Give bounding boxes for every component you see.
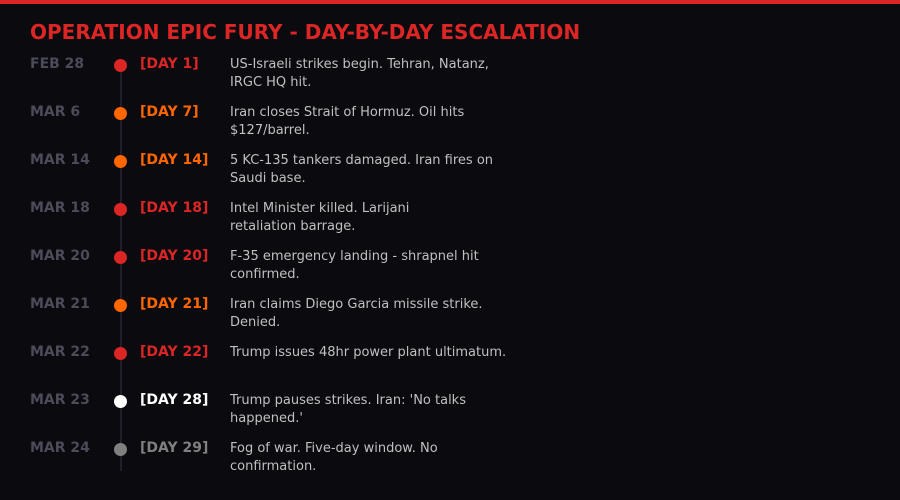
event: Mar 20: [DAY 20]: [140, 248, 208, 264]
event: Mar 23: Trump pauses strikes. Iran: 'No talks: [230, 393, 466, 408]
event: Feb 28: [30, 56, 489, 90]
event: Mar 20: confirmed.: [230, 267, 300, 282]
event: Mar 21: [DAY 21]: [140, 296, 208, 312]
event: Mar 14: Saudi base.: [230, 171, 306, 186]
event: Mar 6: $127/barrel.: [230, 123, 310, 138]
event: Mar 22: [30, 344, 506, 360]
event: Mar 20: F-35 emergency landing - shrapnel hit: [230, 249, 479, 264]
event: Mar 20: MAR 20: [30, 248, 90, 264]
event: Feb 28: [DAY 1]: [140, 56, 199, 72]
event: Mar 18: retaliation barrage.: [230, 219, 355, 234]
event: Mar 6: MAR 6: [30, 104, 80, 120]
event: Mar 21: MAR 21: [30, 296, 90, 312]
event: Mar 6: [DAY 7]: [140, 104, 199, 120]
event: Mar 24: [30, 440, 438, 474]
event: Mar 24: Fog of war. Five-day window. No: [230, 441, 438, 456]
event: Mar 22: Trump issues 48hr power plant ultimatum.: [230, 345, 506, 360]
event: Mar 14: 5 KC-135 tankers damaged. Iran fires on: [230, 153, 493, 168]
event: Mar 23: happened.': [230, 411, 303, 426]
event: Mar 14: [DAY 14]: [140, 152, 208, 168]
event: Mar 24: confirmation.: [230, 459, 316, 474]
timeline spine: [120, 65, 122, 471]
event: Mar 23: [DAY 28]: [140, 392, 208, 408]
event: Mar 21: Denied.: [230, 315, 280, 330]
event: Mar 24: MAR 24: [30, 440, 90, 456]
event: Mar 21: [30, 296, 483, 330]
event: Mar 14: MAR 14: [30, 152, 90, 168]
event: Mar 14: [30, 152, 493, 186]
event: Feb 28: FEB 28: [30, 56, 84, 72]
title: OPERATION EPIC FURY - DAY-BY-DAY ESCALATION: [30, 20, 580, 44]
event: Mar 20: [30, 248, 479, 282]
event: Mar 22: MAR 22: [30, 344, 90, 360]
event: Mar 18: [DAY 18]: [140, 200, 208, 216]
event: Feb 28: IRGC HQ hit.: [230, 75, 311, 90]
event: Mar 18: MAR 18: [30, 200, 90, 216]
event: Mar 23: MAR 23: [30, 392, 90, 408]
top accent bar: [0, 0, 900, 4]
event: Mar 18: [30, 200, 409, 234]
event: Mar 6: Iran closes Strait of Hormuz. Oil hits: [230, 105, 464, 120]
event: Mar 18: Intel Minister killed. Larijani: [230, 201, 409, 216]
event: Mar 21: Iran claims Diego Garcia missile strike.: [230, 297, 483, 312]
event: Mar 24: [DAY 29]: [140, 440, 208, 456]
event: Mar 6: [30, 104, 464, 138]
event: Mar 22: [DAY 22]: [140, 344, 208, 360]
event: Feb 28: US-Israeli strikes begin. Tehran, Natanz,: [230, 57, 489, 72]
event: Mar 23: [30, 392, 466, 426]
